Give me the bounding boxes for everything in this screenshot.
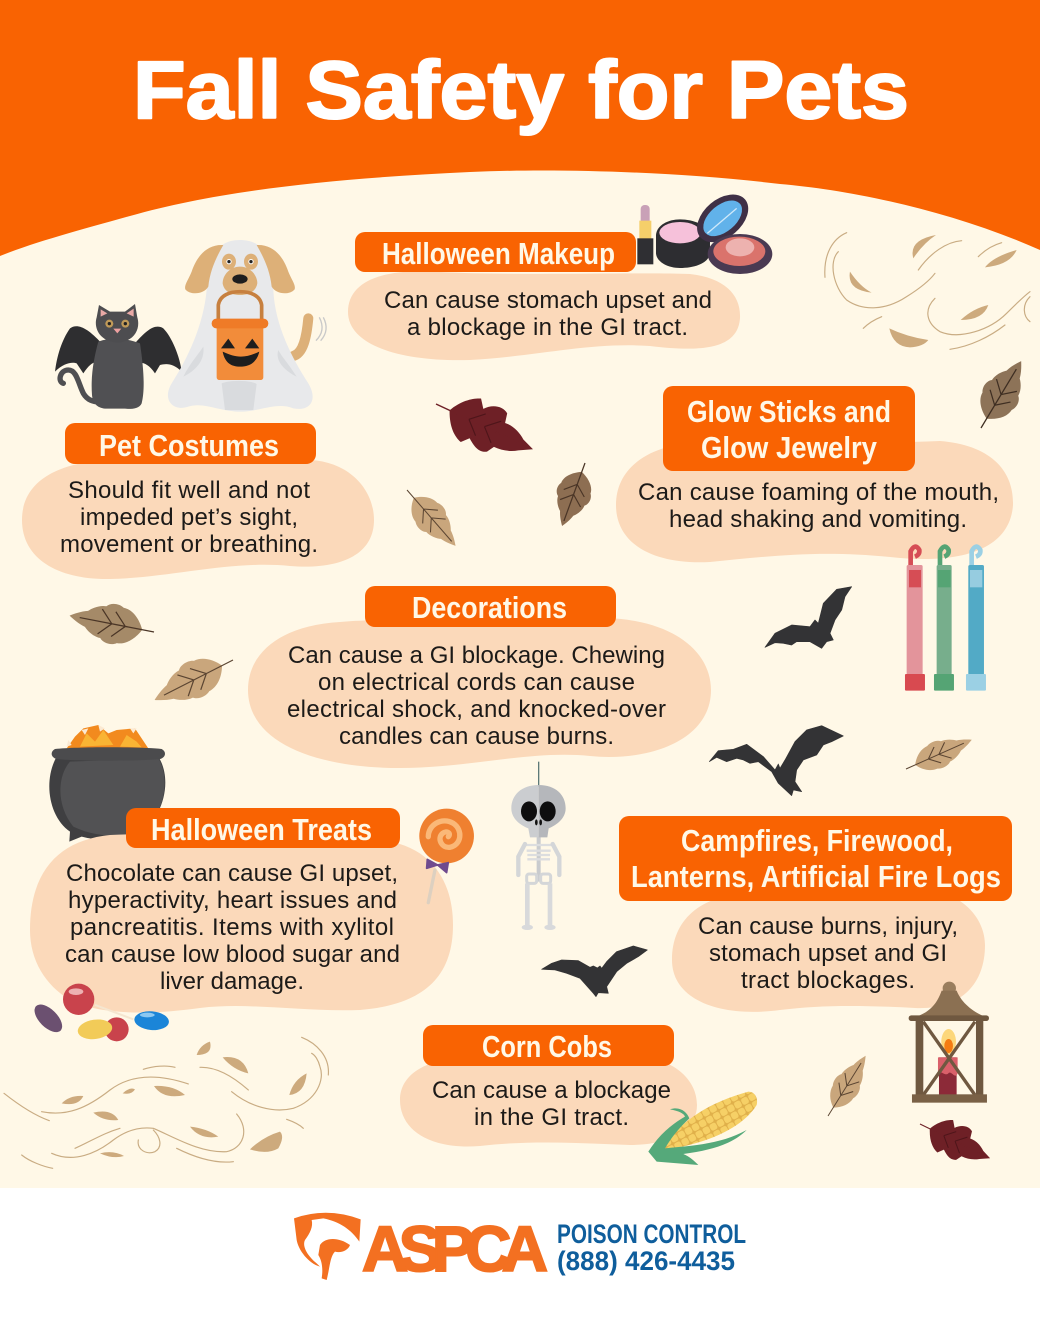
- costumes text: movement or breathing.: [60, 531, 318, 558]
- leaf: maroon centre: [426, 382, 543, 471]
- icon: candies: [30, 984, 170, 1041]
- costumes text: [60, 477, 318, 558]
- leaf: left lower: [146, 643, 242, 717]
- corn text: [432, 1077, 671, 1131]
- corn text: Can cause a blockage: [432, 1077, 671, 1104]
- glow text: [638, 479, 999, 533]
- corn text: in the GI tract.: [474, 1104, 629, 1131]
- icon: corn: [648, 1092, 757, 1165]
- leaf: brown centre: [546, 457, 601, 532]
- decorations text: electrical shock, and knocked-over: [287, 696, 666, 723]
- icon: lantern: [909, 982, 989, 1103]
- illustration: ghost costume dog: [168, 240, 326, 412]
- corn heading: Corn Cobs: [482, 1029, 612, 1064]
- panel: corn cobs: [400, 1025, 757, 1165]
- panel: pet costumes: [22, 423, 374, 579]
- decorations heading: Decorations: [412, 590, 567, 625]
- panel: glow sticks: [616, 386, 1013, 691]
- campfires text: [698, 913, 958, 994]
- treats blob: [30, 834, 453, 1013]
- decorations heading: [365, 586, 616, 627]
- treats text: [65, 860, 400, 995]
- illustration: cauldron with candy corn: [49, 725, 165, 842]
- icon: lollipop: [419, 809, 474, 903]
- glow blob: [616, 441, 1013, 562]
- makeup text: a blockage in the GI tract.: [407, 314, 688, 341]
- illustration: hanging skeleton: [511, 762, 566, 930]
- treats text: can cause low blood sugar and: [65, 941, 400, 968]
- bat: upper right: [765, 587, 852, 648]
- glow text: head shaking and vomiting.: [669, 506, 967, 533]
- illustration: wind and leaves top right: [825, 233, 1030, 349]
- decorations blob: [248, 618, 711, 768]
- corn heading: [423, 1025, 674, 1066]
- footer logo: [294, 1213, 746, 1285]
- logo mark: [294, 1213, 361, 1280]
- campfires text: stomach upset and GI: [709, 940, 947, 967]
- icon: glow sticks: [905, 547, 986, 691]
- costumes text: Should fit well and not: [68, 477, 310, 504]
- illustration: bat costume cat: [55, 304, 182, 409]
- makeup text: Can cause stomach upset and: [384, 287, 712, 314]
- poison control: [557, 1219, 746, 1276]
- makeup heading: Halloween Makeup: [382, 236, 615, 271]
- leaf: left upper: [66, 596, 158, 652]
- title: Fall Safety for Pets: [133, 45, 909, 136]
- costumes blob: [22, 459, 374, 579]
- leaf: tan centre: [395, 479, 468, 556]
- leaf: bottom tan: [817, 1049, 877, 1123]
- decorations text: [287, 642, 666, 750]
- ASPCA wordmark: ASPCA: [362, 1213, 548, 1285]
- panel: halloween makeup: [348, 185, 772, 360]
- makeup blob: [348, 271, 740, 360]
- illustration: wind and leaves bottom left: [4, 1037, 328, 1168]
- glow heading: [663, 386, 915, 471]
- panel: halloween treats: [30, 808, 474, 1041]
- icon: makeup: [637, 185, 772, 274]
- treats text: hyperactivity, heart issues and: [68, 887, 397, 914]
- decorations text: on electrical cords can cause: [318, 669, 635, 696]
- treats heading: Halloween Treats: [151, 812, 372, 847]
- header banner: [0, 0, 1040, 256]
- corn blob: [400, 1056, 697, 1147]
- bat: lower right: [709, 726, 843, 796]
- bat: centre bottom: [542, 946, 647, 997]
- panel: campfires: [619, 816, 1012, 1103]
- treats text: Chocolate can cause GI upset,: [66, 860, 398, 887]
- treats text: pancreatitis. Items with xylitol: [70, 914, 394, 941]
- makeup text: [384, 287, 712, 341]
- treats text: liver damage.: [160, 968, 304, 995]
- campfires blob: [672, 890, 985, 1012]
- campfires heading: Campfires, Firewood,: [681, 823, 953, 858]
- campfires heading: Lanterns, Artificial Fire Logs: [631, 859, 1001, 894]
- glow heading: Glow Sticks and: [687, 394, 891, 429]
- decorations text: candles can cause burns.: [339, 723, 614, 750]
- poison control: (888) 426-4435: [557, 1246, 735, 1276]
- costumes text: impeded pet’s sight,: [80, 504, 298, 531]
- decorations text: Can cause a GI blockage. Chewing: [288, 642, 665, 669]
- leaf: brown top right: [965, 351, 1038, 438]
- leaf: right middle: [900, 727, 977, 782]
- glow text: Can cause foaming of the mouth,: [638, 479, 999, 506]
- campfires text: Can cause burns, injury,: [698, 913, 958, 940]
- glow heading: Glow Jewelry: [701, 430, 878, 465]
- costumes heading: Pet Costumes: [99, 428, 279, 463]
- panel: decorations: [248, 586, 711, 768]
- leaf: bottom maroon: [912, 1108, 998, 1174]
- poison control: POISON CONTROL: [557, 1219, 746, 1249]
- campfires heading: [619, 816, 1012, 901]
- campfires text: tract blockages.: [741, 967, 915, 994]
